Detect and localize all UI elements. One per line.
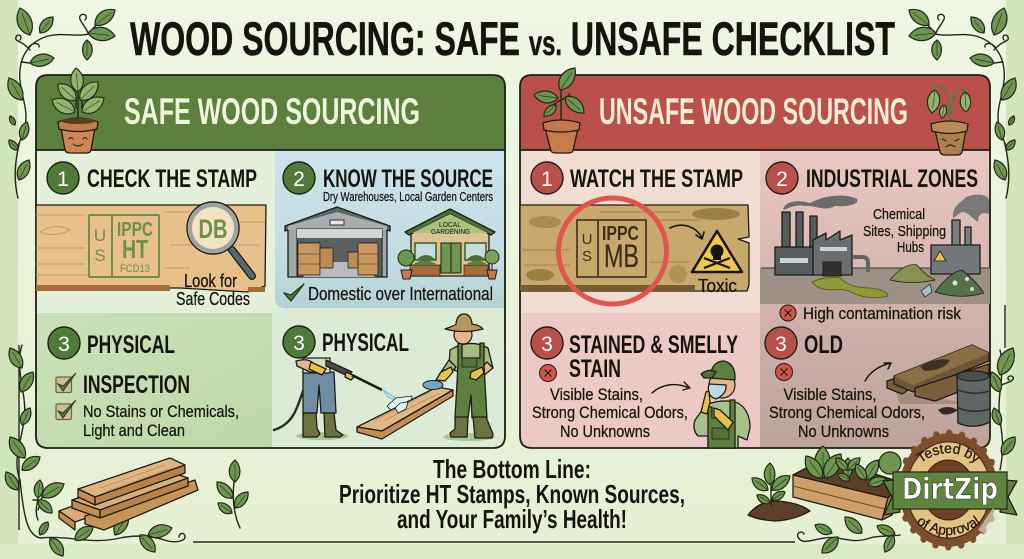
IPPC MB stamp: MB — [604, 238, 639, 274]
step 3 number badge: physical wash: 3 — [293, 332, 305, 355]
waste piles — [890, 265, 935, 282]
step 3 number badge: inspection — [48, 327, 80, 359]
icon: happy potted plant — [49, 67, 108, 153]
icon: wilted sad plant — [926, 86, 971, 155]
inspection text: No Stains or Chemicals, — [83, 402, 239, 421]
badge glint — [978, 508, 999, 534]
IPPC MB stamp: S — [582, 248, 592, 265]
bottom line message: The Bottom Line: — [433, 454, 591, 484]
decorative sprig — [213, 460, 252, 528]
illustration: seedling in soil — [748, 463, 810, 521]
red warning circle — [558, 198, 666, 304]
Look for Safe Codes caption: Look for — [184, 271, 237, 291]
checkbox icon 1 — [56, 373, 76, 392]
high contamination risk text: High contamination risk — [803, 304, 961, 323]
stained warning text: Visible Stains, — [550, 385, 643, 404]
smoke — [783, 196, 857, 210]
illustration: farmer with hat — [423, 314, 495, 441]
icon: toxic hazard triangle — [692, 231, 742, 272]
step 3 heading: physical wash: PHYSICAL — [322, 329, 409, 357]
stained wood plank — [520, 198, 749, 304]
icon: magnifying glass on DB code — [187, 202, 252, 276]
old heading: OLD — [804, 331, 843, 359]
icon: warehouse — [285, 207, 390, 277]
panel outline — [520, 75, 990, 448]
inspection heading: INSPECTION — [83, 371, 190, 399]
stained heading: STAINED & SMELLY — [569, 331, 738, 359]
shop sign: LOCAL — [439, 220, 461, 229]
step 2 number badge: 2 — [776, 168, 788, 191]
bottom line message — [339, 454, 685, 534]
old warning text: Visible Stains, — [784, 385, 876, 404]
panel background: physical lower right — [272, 308, 505, 448]
vine: top right — [906, 5, 1021, 198]
stained warning text: No Unknowns — [560, 422, 650, 441]
stained warning text: Strong Chemical Odors, — [532, 403, 688, 422]
icon: x mark high risk — [780, 305, 796, 321]
old warning text: Strong Chemical Odors, — [769, 403, 925, 422]
panel background: safe upper left — [36, 150, 275, 313]
vine: bottom left — [1, 345, 185, 559]
IPPC HT stamp: HT — [122, 234, 148, 264]
step 1 heading: WATCH THE STAMP — [570, 165, 743, 193]
badge ribbon — [893, 472, 1007, 509]
title: WOOD SOURCING: SAFE vs. UNSAFE CHECKLIST — [130, 12, 895, 65]
vine: top left — [3, 5, 118, 198]
badge bottom text: of Approval — [918, 515, 980, 538]
IPPC HT stamp: IPPC — [117, 219, 153, 241]
step 1 number badge: 1 — [541, 168, 553, 191]
illustration: wood plank being cleaned — [357, 387, 453, 439]
icon: x mark stain — [540, 364, 556, 382]
industrial sites text: Hubs — [897, 239, 924, 256]
inspection text — [83, 402, 239, 440]
arrow to toxic symbol — [670, 225, 704, 239]
bottom line message: and Your Family’s Health! — [397, 504, 627, 534]
stained warning text — [532, 385, 688, 441]
panel: unsafe wood sourcing — [520, 64, 990, 448]
illustration: stack of wood planks — [59, 458, 198, 530]
IPPC MB stamp: IPPC — [602, 223, 639, 245]
badge DirtZip wordmark: DirtZip — [902, 472, 998, 506]
panel background: stained and smelly — [520, 313, 760, 448]
step 3 heading: physical: PHYSICAL — [87, 331, 175, 359]
illustration: pressure washing person — [274, 358, 412, 440]
IPPC MB stamp — [577, 220, 646, 277]
checkbox icon 2 — [56, 400, 76, 420]
step 2 heading: KNOW THE SOURCE — [323, 165, 493, 193]
domestic over international note: Domestic over International — [308, 284, 493, 304]
illustration: industrial zone — [760, 195, 990, 304]
badge: tested by DirtZip of approval — [882, 430, 1018, 550]
panel outline — [36, 75, 505, 448]
panel background: industrial and old column — [760, 150, 990, 448]
step 2 number badge — [766, 162, 798, 194]
Look for Safe Codes caption — [176, 271, 250, 309]
panel background: know the source — [275, 150, 505, 308]
IPPC HT stamp: FCD13 — [120, 263, 150, 275]
shop sign — [431, 220, 470, 236]
shop sign: GARDENING — [431, 227, 470, 236]
safe heading: SAFE WOOD SOURCING — [124, 91, 420, 132]
inspection text: Light and Clean — [83, 421, 185, 440]
Look for Safe Codes caption: Safe Codes — [176, 289, 250, 309]
old warning text — [769, 385, 925, 441]
IPPC MB stamp: U — [582, 231, 592, 248]
wood plank with HT stamp — [36, 202, 266, 292]
header band — [520, 75, 990, 150]
icon: x mark old — [776, 364, 792, 380]
step 1 number badge — [47, 162, 79, 194]
step 2 subheading: Dry Warehouses, Local Garden Centers — [323, 189, 493, 204]
step 1 heading: CHECK THE STAMP — [87, 165, 257, 193]
arrow to old planks — [865, 363, 891, 381]
step 3 number badge: stained — [531, 327, 563, 359]
step 1 number badge — [531, 162, 563, 194]
vine: bottom right ground — [798, 513, 900, 557]
step 3 number badge: stained: 3 — [541, 333, 553, 356]
icon: healthy plant in pot — [533, 64, 588, 153]
step 3 number badge: physical wash — [283, 326, 315, 358]
stained heading: STAIN — [569, 355, 621, 383]
IPPC HT stamp: U — [94, 226, 106, 245]
right factory — [952, 220, 960, 246]
icon: magnifying glass on DB code: DB — [198, 214, 228, 244]
IPPC HT stamp — [89, 215, 159, 277]
panel background: inspection — [36, 313, 272, 448]
step 3 number badge: old: 3 — [775, 333, 787, 356]
icon: local garden shop — [398, 209, 499, 279]
illustration: chemical barrel — [938, 371, 990, 426]
vine: bottom right side — [987, 345, 1019, 470]
badge top text: Tested by — [916, 444, 980, 464]
illustration: masked worker — [694, 361, 750, 448]
toxic label: Toxic — [698, 276, 737, 296]
stained heading — [569, 331, 738, 383]
illustration: old stained planks — [887, 345, 989, 404]
panel background: unsafe upper left — [520, 150, 760, 313]
industrial sites text: Chemical — [873, 206, 925, 223]
header band — [36, 75, 505, 150]
step 2 number badge: 2 — [293, 168, 305, 191]
industrial sites text: Sites, Shipping — [863, 223, 946, 240]
step 2 number badge — [283, 162, 315, 194]
step 1 number badge: 1 — [57, 168, 69, 191]
yellow spill — [812, 278, 888, 298]
IPPC HT stamp: S — [94, 246, 106, 265]
arrow to masked worker — [652, 382, 690, 393]
left factory — [782, 212, 790, 248]
old warning text: No Unknowns — [798, 422, 889, 441]
industrial sites text — [863, 206, 946, 256]
bottom line message: Prioritize HT Stamps, Known Sources, — [339, 479, 685, 509]
step 3 number badge: old — [765, 327, 797, 359]
panel: safe wood sourcing — [36, 67, 505, 448]
step 3 number badge: inspection: 3 — [58, 333, 70, 356]
illustration: raised garden bed — [793, 446, 901, 520]
